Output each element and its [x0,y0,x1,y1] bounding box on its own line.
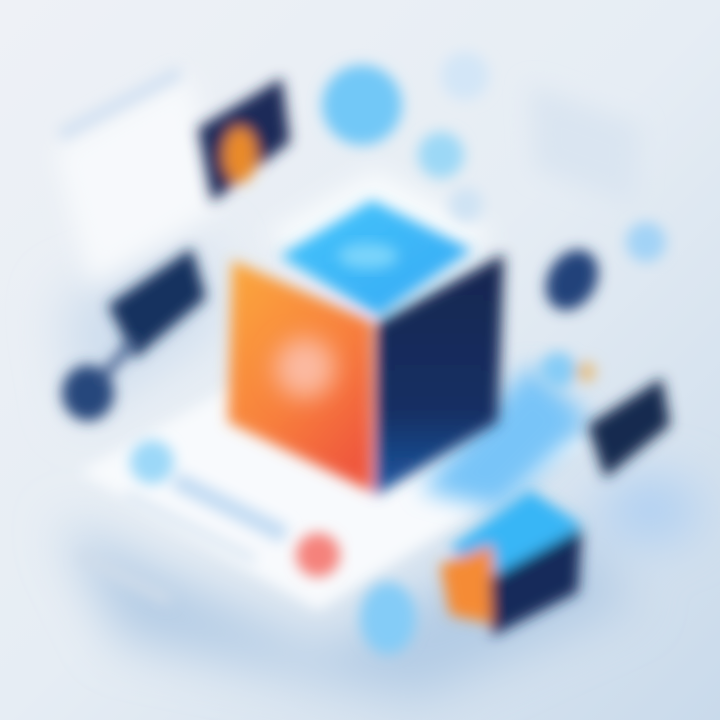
cube left face [228,260,372,492]
platform [80,385,590,610]
platform label: stripes [80,440,285,600]
small cube [440,490,582,636]
small cube top [450,490,582,585]
icon: small multicolor dot [540,352,596,388]
cube halo [265,170,495,300]
icon: pale circle small [449,188,483,222]
small cube right [490,528,582,636]
icon: small dark node [62,340,135,421]
background card: upper left [55,75,215,285]
cube top highlight [338,243,398,269]
small cube left [440,545,498,625]
platform glow: right [420,365,590,510]
cube right face [375,254,504,496]
cube top face [280,200,472,316]
icon: dark tile upper [198,78,290,202]
platform shadow [60,240,700,700]
icon: dark tile left [108,248,206,358]
cube face emblem [275,338,335,398]
icon: red dot [296,533,340,577]
icon: blue circle bottom [360,582,416,654]
background label: upper left stripe [60,72,180,135]
background card: upper right [530,85,640,205]
icon: blue circle large [322,65,402,145]
icon: blue circle right [626,222,666,262]
icon: dark oval right [535,240,609,320]
icon: dark tile right [588,378,670,478]
icon: blue circle medium [418,132,464,178]
cube [228,200,504,496]
icon: pale circle [441,52,489,100]
